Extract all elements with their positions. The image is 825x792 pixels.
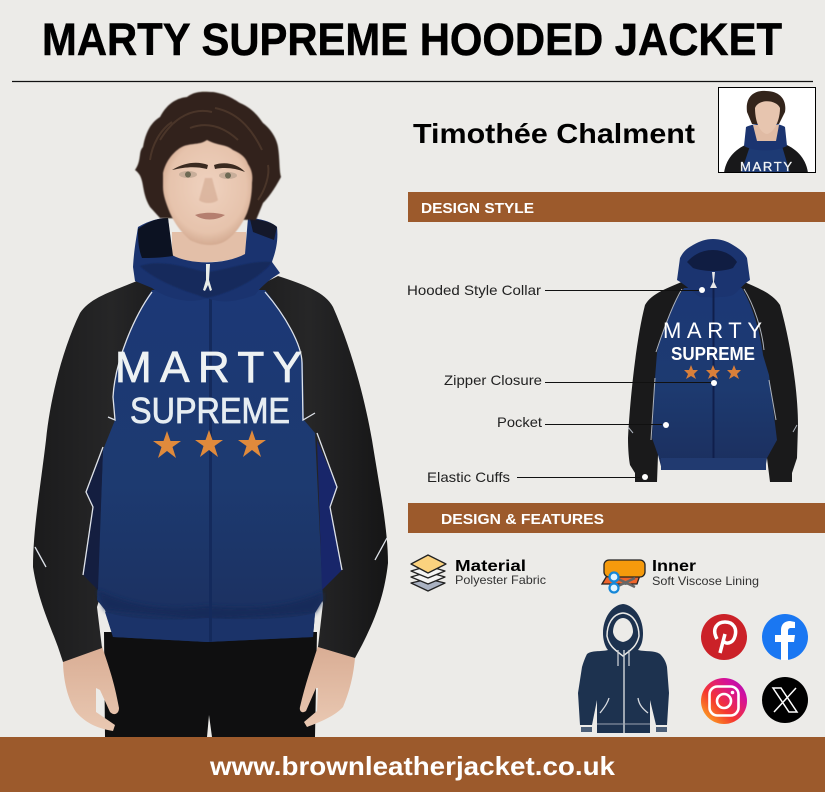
callout: zipper closure: Zipper Closure: [444, 372, 542, 388]
icon: pinterest: [701, 614, 747, 660]
title: MARTY SUPREME HOODED JACKET: [42, 14, 782, 65]
face: [163, 140, 252, 245]
thumbnail portrait: [718, 88, 816, 174]
footer band: [0, 737, 825, 792]
jacket lettering: MARTY: [115, 343, 302, 392]
icon: x: [762, 677, 808, 723]
diagram stars: [684, 365, 741, 379]
lips: [195, 213, 225, 220]
jacket body: [97, 290, 323, 642]
name heading: Timothée Chalment: [413, 118, 695, 149]
jacket diagram: [628, 239, 798, 482]
icon: navy hoodie: [578, 604, 669, 733]
main photo: model wearing jacket: [33, 92, 388, 737]
jacket diagram: SUPREME: [671, 344, 755, 364]
icon: facebook: [762, 614, 808, 660]
material text: [455, 558, 546, 587]
section bar: design and features: [408, 503, 825, 533]
diagram lettering: MARTY: [663, 318, 762, 343]
section bar: design style: DESIGN STYLE: [421, 200, 534, 217]
callout: hooded style collar: Hooded Style Collar: [407, 282, 541, 298]
icon: instagram: [701, 678, 747, 724]
icon: fabric layers: [411, 555, 446, 591]
hoodie cuffs: [581, 727, 592, 732]
eyes: [179, 171, 197, 178]
zipper: [209, 290, 212, 642]
main photo: model wearing jacket: SUPREME: [130, 390, 290, 431]
callout: hooded style collar: [407, 282, 705, 298]
neck: [172, 232, 246, 262]
inner text: Inner: [652, 558, 696, 575]
inner text: Soft Viscose Lining: [652, 574, 759, 588]
section bar: design and features: DESIGN & FEATURES: [441, 511, 604, 528]
callout: pocket: [497, 414, 669, 430]
hair back: [135, 92, 281, 220]
hair strands: [150, 108, 268, 200]
hem: [105, 612, 315, 642]
footer band: www.brownleatherjacket.co.uk: [209, 751, 616, 781]
eyebrows: [172, 163, 208, 170]
hands: [63, 646, 355, 731]
thumbnail portrait: MARTY: [740, 159, 792, 174]
callout: elastic cuffs: Elastic Cuffs: [427, 469, 510, 485]
zipper pull: [203, 264, 212, 291]
inner text: [652, 558, 759, 588]
callout: elastic cuffs: [427, 469, 648, 485]
white piping: [35, 292, 387, 575]
trousers: [104, 632, 317, 737]
icon: fabric roll and scissors: [602, 560, 645, 592]
hem shading: [97, 590, 323, 620]
nose: [199, 178, 218, 203]
material text: Material: [455, 558, 526, 575]
side panels: [317, 440, 342, 590]
callout: zipper closure: [444, 372, 717, 388]
callout: pocket: Pocket: [497, 414, 542, 430]
section bar: design style: [408, 192, 825, 222]
stars: [153, 430, 266, 458]
sleeves: [33, 281, 190, 662]
material text: Polyester Fabric: [455, 573, 546, 587]
hood: [133, 218, 280, 301]
